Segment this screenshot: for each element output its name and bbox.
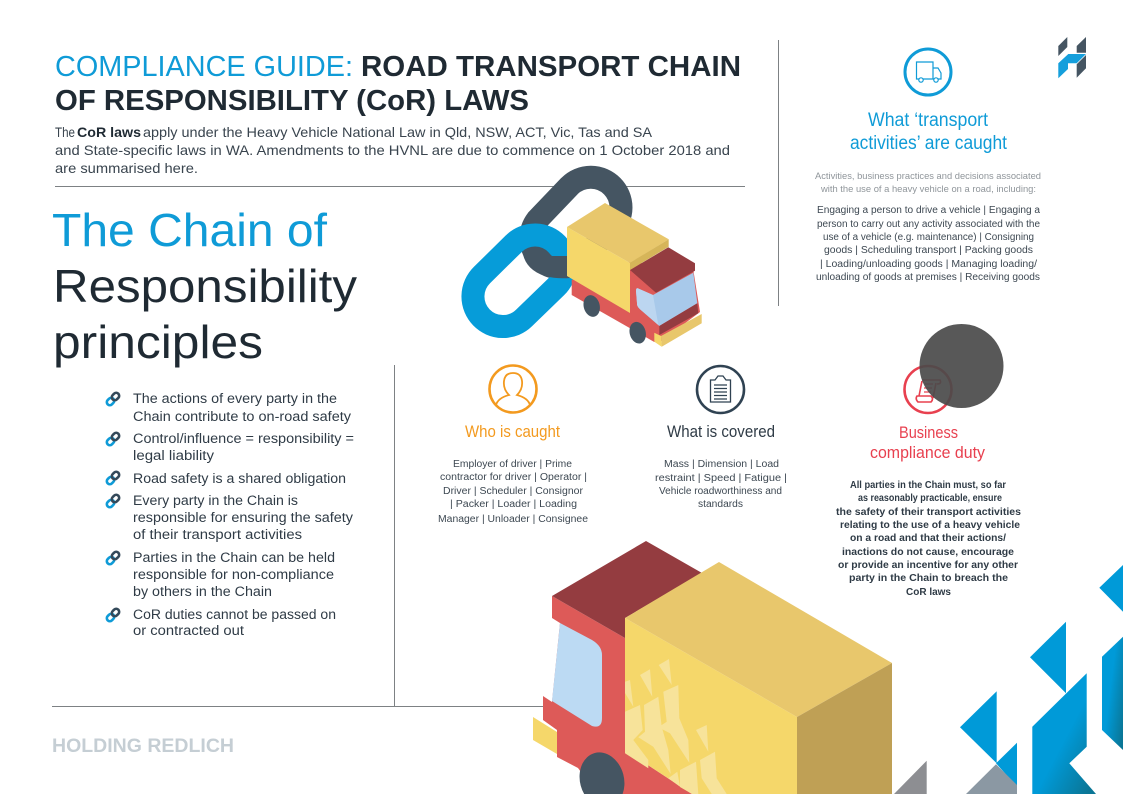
activities list: Engaging a person to drive a vehicle | Engaging a xyxy=(817,205,1040,216)
text: parties: contractor for driver | Operator | xyxy=(440,472,587,483)
decorative grey circle xyxy=(920,324,1004,408)
heading: What ‘transport xyxy=(868,110,989,131)
cab xyxy=(543,596,692,794)
bullet text: of their transport activities xyxy=(133,527,302,542)
icon: blue chain link xyxy=(473,235,565,327)
icon: person xyxy=(490,366,536,412)
text: parties: Driver | Scheduler | Consignor xyxy=(443,486,584,497)
text: duty: inactions do not cause, encourage xyxy=(842,547,1014,558)
activities list: goods | Scheduling transport | Packing goods xyxy=(824,245,1033,256)
activities list: person to carry out any activity associated with the xyxy=(817,219,1040,230)
chain overlap xyxy=(523,247,570,278)
bullet text: legal liability xyxy=(133,448,214,463)
text: coverage: Vehicle roadworthiness and xyxy=(659,486,782,497)
intro text: Activities, business practices and decisions associated xyxy=(815,171,1041,182)
intro text: with the use of a heavy vehicle on a road, including: xyxy=(820,184,1036,195)
title: ROAD TRANSPORT CHAIN xyxy=(361,51,741,83)
panel: what transport activities are caught xyxy=(815,49,1041,283)
wheel xyxy=(574,747,630,794)
bullet text: Road safety is a shared obligation xyxy=(133,471,346,486)
icon: truck xyxy=(905,49,951,95)
heading xyxy=(850,110,1008,154)
activities list: use of a vehicle (e.g. maintenance) | Consigning xyxy=(823,232,1034,243)
text: coverage xyxy=(655,459,787,510)
icon: chain bullets xyxy=(106,392,120,622)
bullet text: Every party in the Chain is xyxy=(133,493,298,508)
text: duty: All parties in the Chain must, so far xyxy=(850,480,1006,491)
bullet text: responsible for ensuring the safety xyxy=(133,510,353,525)
heading: the chain of responsibility principles: principles xyxy=(53,316,263,368)
intro text xyxy=(815,171,1041,195)
activities list xyxy=(816,205,1040,283)
intro paragraph: The xyxy=(55,124,75,140)
panel: who is caught xyxy=(438,366,588,525)
title: COMPLIANCE GUIDE: xyxy=(55,51,353,83)
window xyxy=(552,623,602,727)
icon: scroll xyxy=(904,366,952,413)
title xyxy=(55,51,741,117)
text: duty: CoR laws xyxy=(906,587,951,598)
intro paragraph xyxy=(55,124,730,176)
text: duty: or provide an incentive for any other xyxy=(838,560,1018,571)
decorative blue and grey arrows xyxy=(894,565,1123,794)
text: coverage: Mass | Dimension | Load xyxy=(664,459,779,470)
text: duty: as reasonably practicable, ensure xyxy=(858,493,1002,504)
heading: the chain of responsibility principles: Responsibility xyxy=(53,260,357,312)
heading: Business xyxy=(899,423,958,442)
text: duty: on a road and that their actions/ xyxy=(850,533,1006,544)
panel: business compliance duty xyxy=(836,366,1021,598)
text: parties: Manager | Unloader | Consignee xyxy=(438,514,588,525)
intro paragraph: apply under the Heavy Vehicle National Law in Qld, NSW, ACT, Vic, Tas and SA xyxy=(143,124,653,140)
cargo box xyxy=(625,618,797,794)
bullet text: CoR duties cannot be passed on xyxy=(133,607,336,622)
text: duty: relating to the use of a heavy vehicle xyxy=(840,520,1020,531)
icon: dark chain link xyxy=(531,177,621,268)
bullet text: Control/influence = responsibility = xyxy=(133,431,354,446)
bullet text xyxy=(133,391,354,638)
logo xyxy=(1058,37,1086,78)
bullet text: Chain contribute to on-road safety xyxy=(133,409,351,424)
heading: What is covered xyxy=(667,422,775,441)
activities list: | Loading/unloading goods | Managing loading/ xyxy=(820,259,1037,270)
heading: the chain of responsibility principles: The Chain of xyxy=(52,204,327,256)
activities list: unloading of goods at premises | Receiving goods xyxy=(816,272,1040,283)
bullet text: responsible for non-compliance xyxy=(133,567,334,582)
bullet text: The actions of every party in the xyxy=(133,391,337,406)
intro paragraph: and State-specific laws in WA. Amendments to the HVNL are due to commence on 1 October 2018 and xyxy=(55,142,730,158)
text: parties: | Packer | Loader | Loading xyxy=(450,499,577,510)
heading xyxy=(870,423,985,462)
bullet text: by others in the Chain xyxy=(133,584,272,599)
text: duty: party in the Chain to breach the xyxy=(849,573,1008,584)
intro paragraph: CoR laws xyxy=(77,124,141,140)
fragile pattern xyxy=(625,659,727,794)
panel: what is covered xyxy=(655,366,787,510)
heading: activities’ are caught xyxy=(850,133,1008,154)
text: coverage: restraint | Speed | Fatigue | xyxy=(655,473,787,484)
bullet list: principles xyxy=(106,391,354,638)
cab roof xyxy=(552,541,702,638)
large truck illustration xyxy=(533,541,892,794)
heading: Who is caught xyxy=(465,422,560,441)
illustration: chain links and small truck xyxy=(473,177,702,347)
intro paragraph: are summarised here. xyxy=(55,160,198,176)
bumper xyxy=(533,717,557,754)
text: coverage: standards xyxy=(698,499,743,510)
bullet text: or contracted out xyxy=(133,623,244,638)
title: OF RESPONSIBILITY (CoR) LAWS xyxy=(55,85,529,117)
bullet text: Parties in the Chain can be held xyxy=(133,550,335,565)
text: parties: Employer of driver | Prime xyxy=(453,459,572,470)
footer: holding redlich: HOLDING REDLICH xyxy=(52,736,234,757)
text: duty: the safety of their transport activities xyxy=(836,507,1021,518)
heading: the chain of responsibility principles xyxy=(52,204,357,368)
text: duty xyxy=(836,480,1021,598)
text: parties xyxy=(438,459,588,525)
heading: compliance duty xyxy=(870,443,985,462)
small truck xyxy=(567,203,702,347)
icon: clipboard xyxy=(697,366,744,413)
